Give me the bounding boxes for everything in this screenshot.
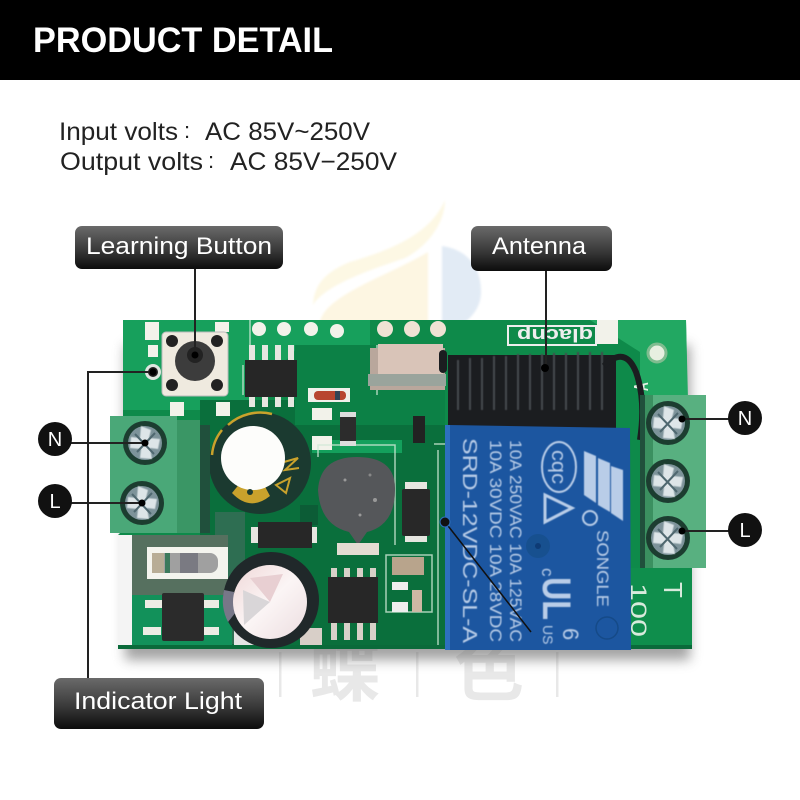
marker: right N [678,401,762,435]
marker: left N: N [48,429,62,451]
circuit board [118,320,692,649]
relay markings [458,438,623,644]
watermark characters: 色 [454,632,524,710]
indicator LED [145,364,161,380]
silkscreen label [508,325,596,345]
silkscreen number: 100 [626,583,651,637]
resistor [147,547,228,579]
voltage specifications [59,118,397,176]
relay pointer [440,517,531,632]
voltage specifications: Output volts [60,148,203,176]
relay markings: SONGLE [593,530,612,607]
relay markings: US [540,625,556,644]
diode red [308,388,350,402]
voltage specifications: AC 85V~250V [205,118,370,146]
right terminal block [640,395,706,568]
relay markings: cqc [547,450,569,484]
transistor [413,416,425,443]
voltage specifications: : [184,118,190,143]
relay [445,425,631,650]
voltage specifications: AC 85V−250V [230,148,397,176]
relay markings: 10A 30VDC 10A 28VDC [486,440,505,642]
silkscreen T: T [658,582,688,598]
header bar [0,0,800,80]
relay markings: 10A 250VAC 10A 125VAC [506,440,525,642]
chip U1 [245,345,297,407]
watermark characters [279,632,558,710]
callout: antenna: Antenna [492,233,587,260]
left terminal block [110,416,210,533]
crystal oscillator [368,344,446,390]
SMD diode D1 [251,522,317,548]
mounting hole [648,344,666,362]
chip U2 [328,568,378,640]
small diode [340,412,356,446]
callout: indicator light [54,368,264,729]
SMD diode D2 [402,482,430,542]
electrolytic capacitor 1 [209,412,311,514]
antenna coil [439,350,642,440]
marker: left N [38,422,148,456]
heading: PRODUCT DETAIL [33,21,333,60]
board shadow [125,345,690,660]
board pads [145,320,618,450]
callout: learning button: Learning Button [86,233,272,260]
relay markings: c [538,568,557,577]
marker: right N: N [738,408,752,430]
marker: left L: L [49,491,61,513]
marker: left L [38,484,146,518]
relay markings: UL [534,577,578,620]
callout: learning button [75,226,283,358]
watermark characters: 蝶 [310,632,380,710]
voltage specifications: : [208,148,214,173]
marker: right L: L [739,520,751,542]
electrolytic capacitor 2 [223,552,319,648]
learning button switch [162,332,228,396]
relay markings: 6 [558,628,583,640]
inductor [318,457,395,545]
small components [392,557,424,612]
watermark logo [313,200,481,322]
transistor Q1 [143,593,219,641]
relay markings: SRD-12VDC-SL-A [458,438,480,644]
voltage specifications: Input volts [59,118,178,146]
callout: antenna [471,226,612,372]
silkscreen label: qlacnp [517,325,593,345]
marker: right L [678,513,762,547]
callout: indicator light: Indicator Light [74,688,242,715]
silkscreen A: A [631,382,653,391]
